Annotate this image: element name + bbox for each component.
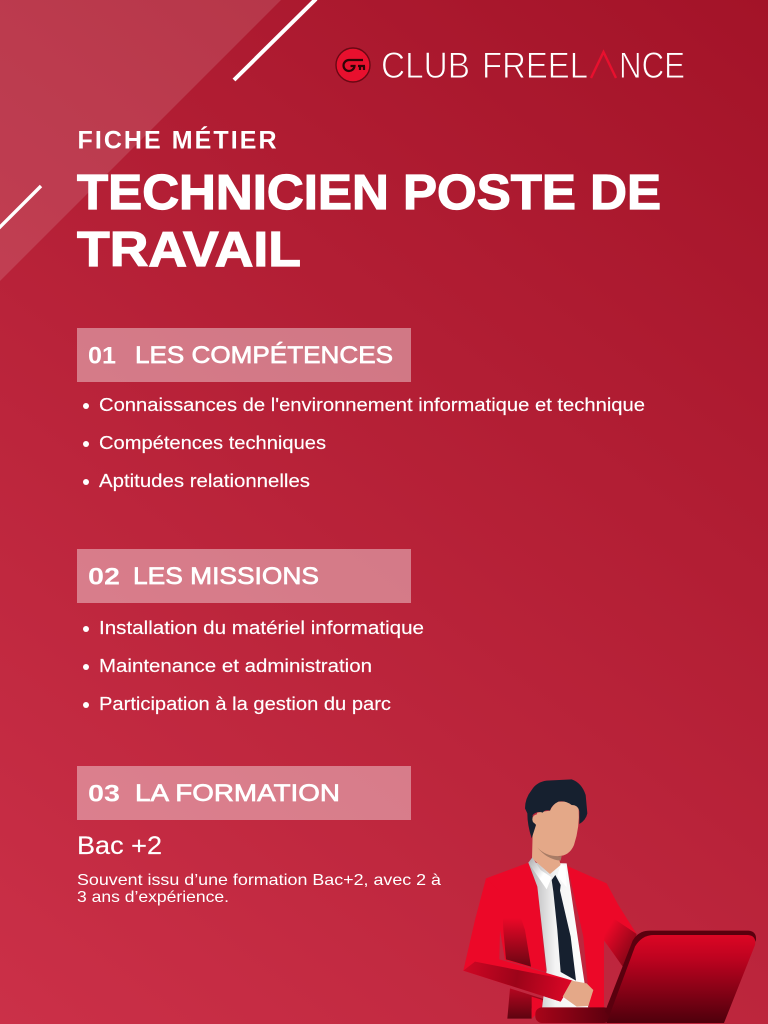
laptop screen front <box>607 935 755 1023</box>
collar <box>528 857 567 889</box>
panel: la formation <box>77 766 441 906</box>
shirt <box>528 863 588 1008</box>
decorative diagonal line top <box>234 0 316 80</box>
bullet list: missions: Installation du matériel informatique <box>99 618 424 638</box>
neck and face <box>532 802 579 874</box>
section heading 03: 03 <box>88 780 120 808</box>
neck shadow <box>537 847 562 861</box>
diploma level: Bac +2 <box>77 832 162 860</box>
bullet list: missions: Participation à la gestion du parc <box>99 694 391 714</box>
right jacket and arm <box>567 866 637 1008</box>
hand <box>563 981 593 1007</box>
decorative diagonal line left <box>0 186 41 229</box>
panel: les missions <box>77 549 424 714</box>
section heading 01: 01 <box>88 342 116 370</box>
logo wordmark: CLUB <box>381 45 470 86</box>
section heading 01 <box>77 328 411 382</box>
section heading 02: LES MISSIONS <box>133 563 319 590</box>
laptop <box>535 931 756 1023</box>
section heading 03 <box>77 766 411 820</box>
bullet list: competences: Compétences techniques <box>99 433 326 453</box>
logo: Club Freelance <box>336 45 685 86</box>
title: TRAVAIL <box>77 222 301 277</box>
tie <box>552 875 576 981</box>
icon: key in red circle <box>336 48 370 82</box>
section heading 02 <box>77 549 411 603</box>
subtitle: fiche metier: FICHE MÉTIER <box>78 126 276 154</box>
formation description <box>77 872 441 906</box>
ear <box>532 814 542 824</box>
left arm <box>463 878 573 1002</box>
panel: les competences <box>77 328 645 491</box>
bullet list: missions: Maintenance et administration <box>99 656 372 676</box>
decorative corner triangle <box>0 0 281 281</box>
bullet list: missions <box>83 618 424 714</box>
logo wordmark <box>381 45 685 86</box>
section heading 02: 02 <box>88 564 120 590</box>
formation description: Souvent issu d’une formation Bac+2, avec 2 à <box>77 872 441 889</box>
logo wordmark: NCE <box>619 45 685 86</box>
bullet list: competences: Connaissances de l'environnement informatique et technique <box>99 395 645 415</box>
left jacket body <box>486 863 547 1019</box>
section heading 01: LES COMPÉTENCES <box>135 342 393 369</box>
illustration: man with laptop <box>463 779 756 1023</box>
section heading 03: LA FORMATION <box>135 780 340 807</box>
title: TECHNICIEN POSTE DE <box>77 165 661 220</box>
bullet list: competences <box>83 395 645 491</box>
hair <box>525 779 587 838</box>
laptop screen back <box>605 931 756 1017</box>
logo wordmark: FREEL <box>482 45 588 86</box>
laptop base <box>535 1007 611 1023</box>
bullet list: competences: Aptitudes relationnelles <box>99 471 310 491</box>
title <box>77 165 661 277</box>
formation description: 3 ans d’expérience. <box>77 889 229 906</box>
